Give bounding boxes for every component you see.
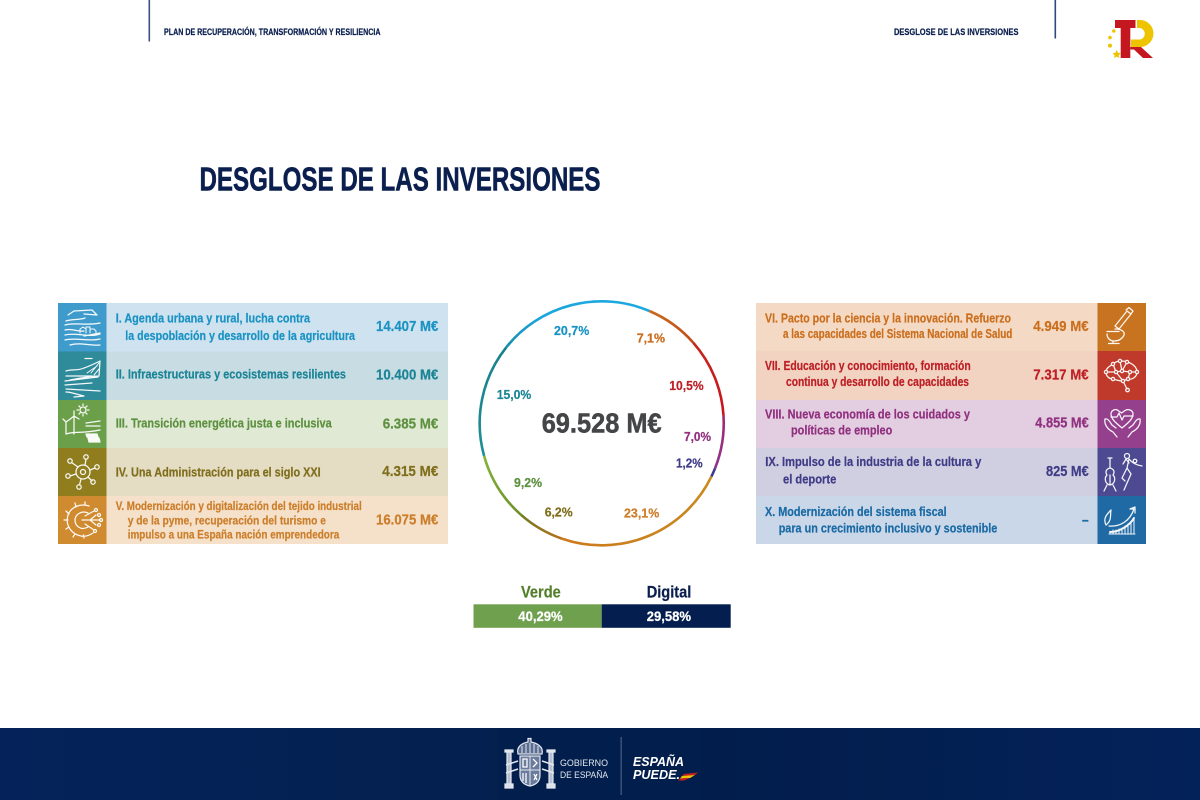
row II: 10.400 M€ bbox=[376, 367, 438, 383]
text: Gobierno de España: DE ESPAÑA bbox=[560, 770, 608, 780]
legend: verde and digital shares bbox=[474, 584, 731, 628]
logo: TR bbox=[1108, 20, 1154, 58]
row V: V. Modernización y digitalización del tejido industrial bbox=[116, 501, 362, 513]
ring percentages: 7,0% bbox=[684, 430, 711, 444]
ring percentages: 10,5% bbox=[669, 379, 704, 393]
row III bbox=[58, 400, 448, 448]
row VIII bbox=[756, 400, 1146, 448]
icon: hands holding a heart bbox=[1105, 410, 1140, 437]
title: DESGLOSE DE LAS INVERSIONES bbox=[200, 162, 600, 199]
panel: left list of policy levers I to V bbox=[58, 303, 448, 544]
row IX: 825 M€ bbox=[1046, 464, 1089, 480]
text: Gobierno de España bbox=[560, 758, 608, 780]
row IV: 4.315 M€ bbox=[382, 464, 438, 480]
icon: urban and rural landscape bbox=[65, 310, 100, 345]
ring percentages: 20,7% bbox=[554, 324, 589, 338]
row VI: 4.949 M€ bbox=[1033, 319, 1089, 335]
row V: impulso a una España nación emprendedora bbox=[128, 529, 340, 541]
row VI: a las capacidades del Sistema Nacional de Salud bbox=[783, 327, 1012, 341]
legend: verde and digital shares: Digital bbox=[647, 584, 691, 602]
icon: sun, wind turbines and solar panels bbox=[63, 404, 100, 442]
icon: microscope bbox=[1107, 308, 1133, 344]
row IV bbox=[58, 448, 448, 496]
row VI: VI. Pacto por la ciencia y la innovación. Refuerzo bbox=[765, 311, 1011, 325]
icon: infrastructure and ecosystems bbox=[65, 358, 100, 397]
row VII bbox=[756, 351, 1146, 400]
icon: rising growth chart bbox=[1105, 507, 1135, 534]
row X: X. Modernización del sistema fiscal bbox=[765, 505, 947, 519]
row VII: 7.317 M€ bbox=[1033, 367, 1089, 383]
ring percentages: 23,1% bbox=[624, 507, 659, 521]
text: España puede bbox=[633, 754, 698, 782]
ring percentages bbox=[497, 324, 711, 521]
row II: II. Infraestructuras y ecosistemas resilientes bbox=[116, 367, 346, 381]
row VIII: políticas de empleo bbox=[791, 423, 893, 437]
row IV: IV. Una Administración para el siglo XXI bbox=[116, 466, 321, 480]
legend: verde and digital shares: 29,58% bbox=[647, 608, 692, 624]
row IX bbox=[756, 448, 1146, 496]
text: España puede: PUEDE. bbox=[633, 768, 680, 782]
row VII: continua y desarrollo de capacidades bbox=[786, 375, 969, 389]
row IX: IX. Impulso de la industria de la cultura y bbox=[765, 455, 981, 469]
icon: gear with digital connectors bbox=[64, 502, 102, 538]
panel: right list of policy levers VI to X bbox=[756, 303, 1146, 544]
icon: digital administration network bbox=[66, 455, 99, 489]
ring percentages: 7,1% bbox=[637, 331, 665, 345]
icon: brain network tree bbox=[1104, 359, 1139, 392]
row II bbox=[58, 352, 448, 400]
divider bbox=[620, 737, 622, 795]
row VII: VII. Educación y conocimiento, formación bbox=[765, 359, 971, 373]
legend: verde and digital shares: 40,29% bbox=[518, 608, 563, 624]
row I bbox=[58, 303, 448, 352]
header: left section: PLAN DE RECUPERACIÓN, TRANSFORMACIÓN Y RESILIENCIA bbox=[164, 26, 381, 37]
row V: 16.075 M€ bbox=[376, 512, 438, 528]
row III: III. Transición energética justa e inclusiva bbox=[116, 417, 333, 431]
legend: verde and digital shares: Verde bbox=[521, 584, 561, 602]
ring percentages: 1,2% bbox=[676, 457, 703, 471]
ring percentages: 9,2% bbox=[514, 476, 542, 490]
text: España puede: ESPAÑA bbox=[633, 754, 684, 769]
row IX: el deporte bbox=[783, 472, 836, 486]
icon: coat of arms of Spain bbox=[505, 738, 555, 788]
row I: 14.407 M€ bbox=[376, 319, 438, 335]
ring segments bbox=[480, 301, 724, 545]
row I: la despoblación y desarrollo de la agricultura bbox=[125, 329, 356, 343]
ring percentages: 15,0% bbox=[497, 388, 531, 402]
row X bbox=[756, 496, 1146, 544]
row X: – bbox=[1082, 513, 1089, 529]
text: Gobierno de España: GOBIERNO bbox=[560, 758, 608, 768]
row V bbox=[58, 496, 448, 544]
icon: cello and basketball player bbox=[1104, 454, 1142, 491]
chart: investment ring bbox=[480, 301, 724, 545]
row X: para un crecimiento inclusivo y sostenible bbox=[779, 522, 997, 536]
ring percentages: 6,2% bbox=[545, 506, 573, 520]
row VI bbox=[756, 303, 1146, 351]
ring total: 69.528 M€ bbox=[542, 407, 662, 438]
row V: y de la pyme, recuperación del turismo e bbox=[128, 515, 326, 527]
footer band bbox=[0, 728, 1200, 800]
row VIII: VIII. Nueva economía de los cuidados y bbox=[765, 407, 970, 421]
row III: 6.385 M€ bbox=[383, 416, 438, 432]
row I: I. Agenda urbana y rural, lucha contra bbox=[116, 311, 311, 325]
row VIII: 4.855 M€ bbox=[1035, 416, 1089, 432]
header: right section: DESGLOSE DE LAS INVERSIONES bbox=[894, 27, 1018, 37]
